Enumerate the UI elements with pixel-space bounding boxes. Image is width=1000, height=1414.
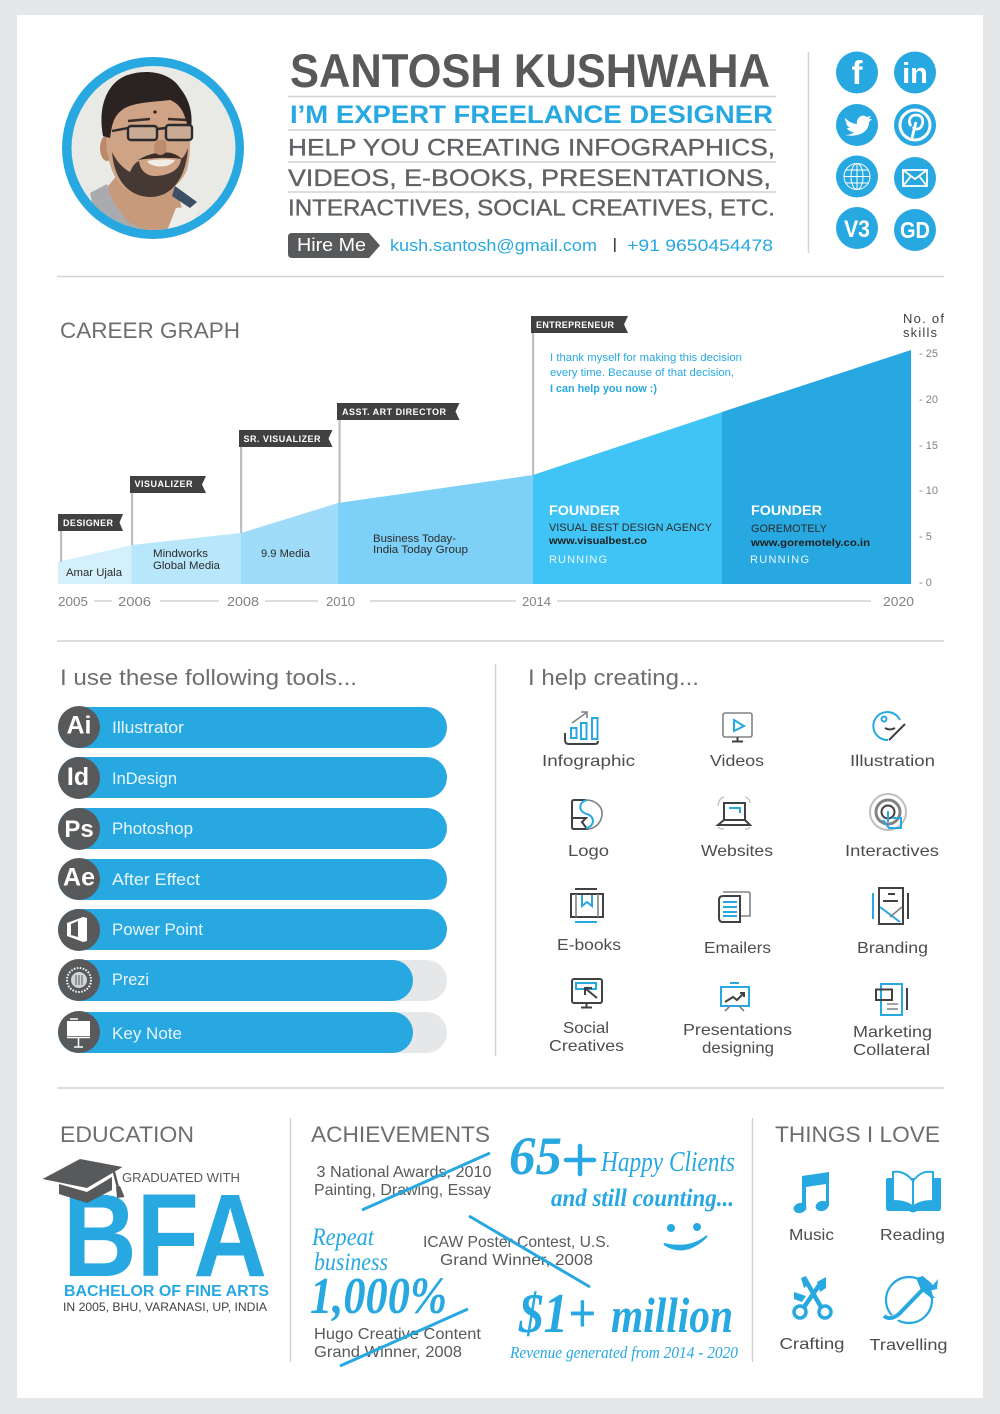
tool: prezi: Prezi (112, 971, 149, 989)
panel: I help creating (528, 665, 939, 1059)
item: social creatives: Social (563, 1020, 609, 1037)
x axis years: 2010 (326, 594, 355, 609)
x axis years: 2006 (118, 594, 151, 609)
tagline: I’M EXPERT FREELANCE DESIGNER (290, 101, 773, 129)
stat: happy clients: 65 (509, 1126, 562, 1186)
header title block (288, 45, 776, 220)
flag: entrepreneur (531, 316, 628, 475)
description line 3: INTERACTIVES, SOCIAL CREATIVES, ETC. (288, 194, 775, 220)
stat: repeat business: Repeat (311, 1224, 375, 1251)
item: travelling (870, 1276, 948, 1354)
y axis (903, 311, 944, 589)
item: websites (701, 797, 773, 860)
eyeglasses (112, 125, 192, 140)
item: marketing collateral: Marketing (853, 1024, 932, 1041)
item: marketing collateral (853, 984, 932, 1059)
heading: career graph: CAREER GRAPH (60, 318, 240, 343)
icon: go remotely (894, 209, 936, 251)
flag: designer (58, 514, 123, 562)
flag: visualizer (130, 476, 206, 545)
award: hugo: Hugo Creative Content (314, 1326, 482, 1343)
item: infographic: Infographic (542, 753, 635, 770)
stat: revenue: $1+ (518, 1283, 596, 1345)
tool: photoshop (58, 808, 447, 850)
hire me contact row: Hire Me (297, 235, 366, 255)
company labels: Global Media (153, 560, 221, 572)
icon: linkedin (894, 52, 936, 94)
flag: visualizer: VISUALIZER (134, 479, 193, 489)
y axis: - 5 (919, 531, 932, 543)
item: presentations (683, 983, 792, 1057)
social icons (836, 52, 936, 251)
item: branding (857, 888, 928, 957)
item: e-books (557, 889, 621, 954)
item: reading (880, 1172, 945, 1244)
award: hugo: Grand Winner, 2008 (314, 1344, 462, 1361)
founder: goremotely (750, 502, 870, 566)
item: videos (710, 713, 764, 770)
item: music: Music (789, 1227, 834, 1244)
tool: after effect: After Effect (112, 871, 200, 889)
heading: tools: I use these following tools... (60, 665, 357, 690)
tool: illustrator: Ai (66, 712, 92, 740)
founder: visual best (548, 502, 713, 566)
item: social creatives (549, 979, 624, 1055)
award: ICAW: Grand Winner, 2008 (440, 1252, 593, 1269)
entrepreneur note: I can help you now :) (550, 383, 657, 395)
item: presentations: designing (702, 1040, 774, 1057)
flag: senior visualizer: SR. VISUALIZER (244, 434, 321, 444)
tool: indesign: Id (67, 763, 89, 791)
award: national awards: 3 National Awards, 2010 (316, 1164, 492, 1181)
company labels: 9.9 Media (261, 548, 311, 560)
tool: illustrator: Illustrator (112, 719, 185, 737)
item: infographic (542, 712, 635, 770)
founder: visual best: FOUNDER (549, 502, 620, 518)
award: ICAW: ICAW Poster Contest, U.S. (423, 1234, 610, 1251)
founder: goremotely: GOREMOTELY (751, 523, 828, 535)
item: reading: Reading (880, 1227, 945, 1244)
icon: globe (836, 156, 878, 198)
icon: smiley (664, 1223, 707, 1249)
name: SANTOSH KUSHWAHA (290, 45, 770, 98)
tool: after effect (58, 858, 447, 900)
stat: happy clients (509, 1126, 735, 1212)
tool: photoshop: Ps (64, 816, 94, 843)
panel: things I love (775, 1122, 948, 1354)
tool: key note: Key Note (112, 1025, 182, 1043)
x axis years (58, 594, 914, 609)
award: hugo (314, 1309, 482, 1366)
description line 2: VIDEOS, E-BOOKS, PRESENTATIONS, (288, 165, 771, 192)
stat: happy clients: and still counting... (551, 1185, 734, 1212)
hire me contact row (288, 233, 773, 258)
stat: revenue: million (611, 1287, 733, 1343)
item: marketing collateral: Collateral (853, 1042, 930, 1059)
heading: things I love: THINGS I LOVE (775, 1122, 940, 1147)
icon: v3: V3 (844, 216, 870, 243)
item: crafting: Crafting (780, 1336, 844, 1353)
flag: designer: DESIGNER (63, 518, 114, 528)
icon: go remotely: GD (900, 217, 930, 243)
item: logo: Logo (568, 843, 609, 860)
degree name: BACHELOR OF FINE ARTS (64, 1283, 269, 1300)
tool: key note (58, 1011, 447, 1053)
flag: entrepreneur: ENTREPRENEUR (536, 320, 614, 330)
tool: indesign (58, 757, 447, 799)
stat: happy clients: Happy Clients (600, 1146, 735, 1178)
item: travelling: Travelling (870, 1337, 948, 1354)
stat: repeat business: business (314, 1249, 388, 1276)
panel: education (42, 1122, 269, 1314)
tool: prezi (58, 959, 447, 1001)
y axis: No. of (903, 311, 944, 326)
award: national awards: Painting, Drawing, Essay (314, 1182, 491, 1199)
company labels: Business Today- (373, 533, 456, 545)
y axis: - 25 (919, 348, 938, 360)
company labels: India Today Group (373, 544, 468, 556)
icon: email (894, 157, 936, 199)
item: illustration: Illustration (850, 753, 935, 770)
flag: assistant art director (337, 403, 460, 503)
stat: revenue: Revenue generated from 2014 - 2020 (509, 1343, 738, 1362)
item: emailers (704, 892, 771, 957)
tool: after effect: Ae (63, 864, 95, 892)
icon: pinterest (894, 104, 936, 146)
entrepreneur note: I thank myself for making this decision (550, 352, 742, 364)
heading: creating: I help creating... (528, 665, 699, 690)
item: logo (568, 800, 609, 860)
item: emailers: Emailers (704, 940, 771, 957)
stat: repeat business: 1,000% (310, 1268, 447, 1325)
icon: linkedin: in (902, 58, 928, 90)
panel: career graph (58, 311, 944, 609)
item: music (789, 1172, 834, 1244)
award: ICAW (423, 1216, 610, 1287)
founder: visual best: RUNNING (549, 554, 607, 566)
description line 1: HELP YOU CREATING INFOGRAPHICS, (288, 134, 775, 162)
x axis years: 2020 (883, 594, 914, 609)
item: illustration (850, 712, 935, 770)
x axis years: 2014 (522, 594, 551, 609)
item: interactives: Interactives (845, 843, 939, 860)
icon: facebook: f (852, 54, 864, 91)
founder: goremotely: www.goremotely.co.in (750, 537, 870, 549)
BFA letters: BFA (63, 1170, 267, 1302)
entrepreneur note (550, 352, 742, 395)
hire me contact row: kush.santosh@gmail.com (390, 236, 597, 255)
company labels: Mindworks (153, 548, 209, 560)
area chart (58, 350, 911, 584)
item: interactives (845, 794, 939, 860)
y axis: skills (903, 325, 938, 340)
item: presentations: Presentations (683, 1022, 792, 1039)
item: crafting (780, 1276, 844, 1353)
y axis: - 10 (919, 485, 938, 497)
founder: goremotely: FOUNDER (751, 502, 822, 518)
tool: photoshop: Photoshop (112, 820, 193, 838)
tool: power point (58, 909, 447, 951)
stat: revenue (509, 1283, 738, 1362)
x axis years: 2008 (227, 594, 259, 609)
stat: repeat business (310, 1224, 447, 1325)
hire me contact row: +91 9650454478 (627, 236, 773, 255)
tool: indesign: InDesign (112, 770, 177, 788)
graduated with: GRADUATED WITH (122, 1170, 240, 1185)
award: national awards (314, 1153, 492, 1210)
degree details: IN 2005, BHU, VARANASI, UP, INDIA (63, 1302, 267, 1314)
icon: v3 (836, 207, 878, 249)
x axis years: 2005 (58, 594, 88, 609)
y axis: - 15 (919, 440, 938, 452)
company labels (66, 533, 468, 579)
item: websites: Websites (701, 843, 773, 860)
founder: goremotely: RUNNING (750, 554, 809, 566)
founder: visual best: www.visualbest.co (548, 535, 647, 547)
y axis: - 20 (919, 394, 938, 406)
panel: achievements (310, 1122, 738, 1366)
icon: twitter (836, 104, 878, 146)
y axis: - 0 (919, 577, 932, 589)
company labels: Amar Ujala (66, 567, 123, 579)
tool: power point: Power Point (112, 921, 203, 939)
flag: assistant art director: ASST. ART DIRECTOR (342, 407, 446, 417)
item: branding: Branding (857, 940, 928, 957)
founder: visual best: VISUAL BEST DESIGN AGENCY (549, 522, 713, 534)
item: videos: Videos (710, 753, 764, 770)
entrepreneur note: every time. Because of that decision, (550, 367, 734, 379)
panel: tools (58, 665, 447, 1053)
heading: education: EDUCATION (60, 1122, 194, 1147)
heading: achievements: ACHIEVEMENTS (311, 1122, 490, 1147)
profile photo (62, 57, 244, 240)
flag: senior visualizer (239, 430, 332, 533)
icon: facebook (836, 52, 878, 94)
item: e-books: E-books (557, 937, 621, 954)
tool: illustrator (58, 706, 447, 748)
icon: graduation cap (42, 1159, 124, 1203)
item: social creatives: Creatives (549, 1038, 624, 1055)
